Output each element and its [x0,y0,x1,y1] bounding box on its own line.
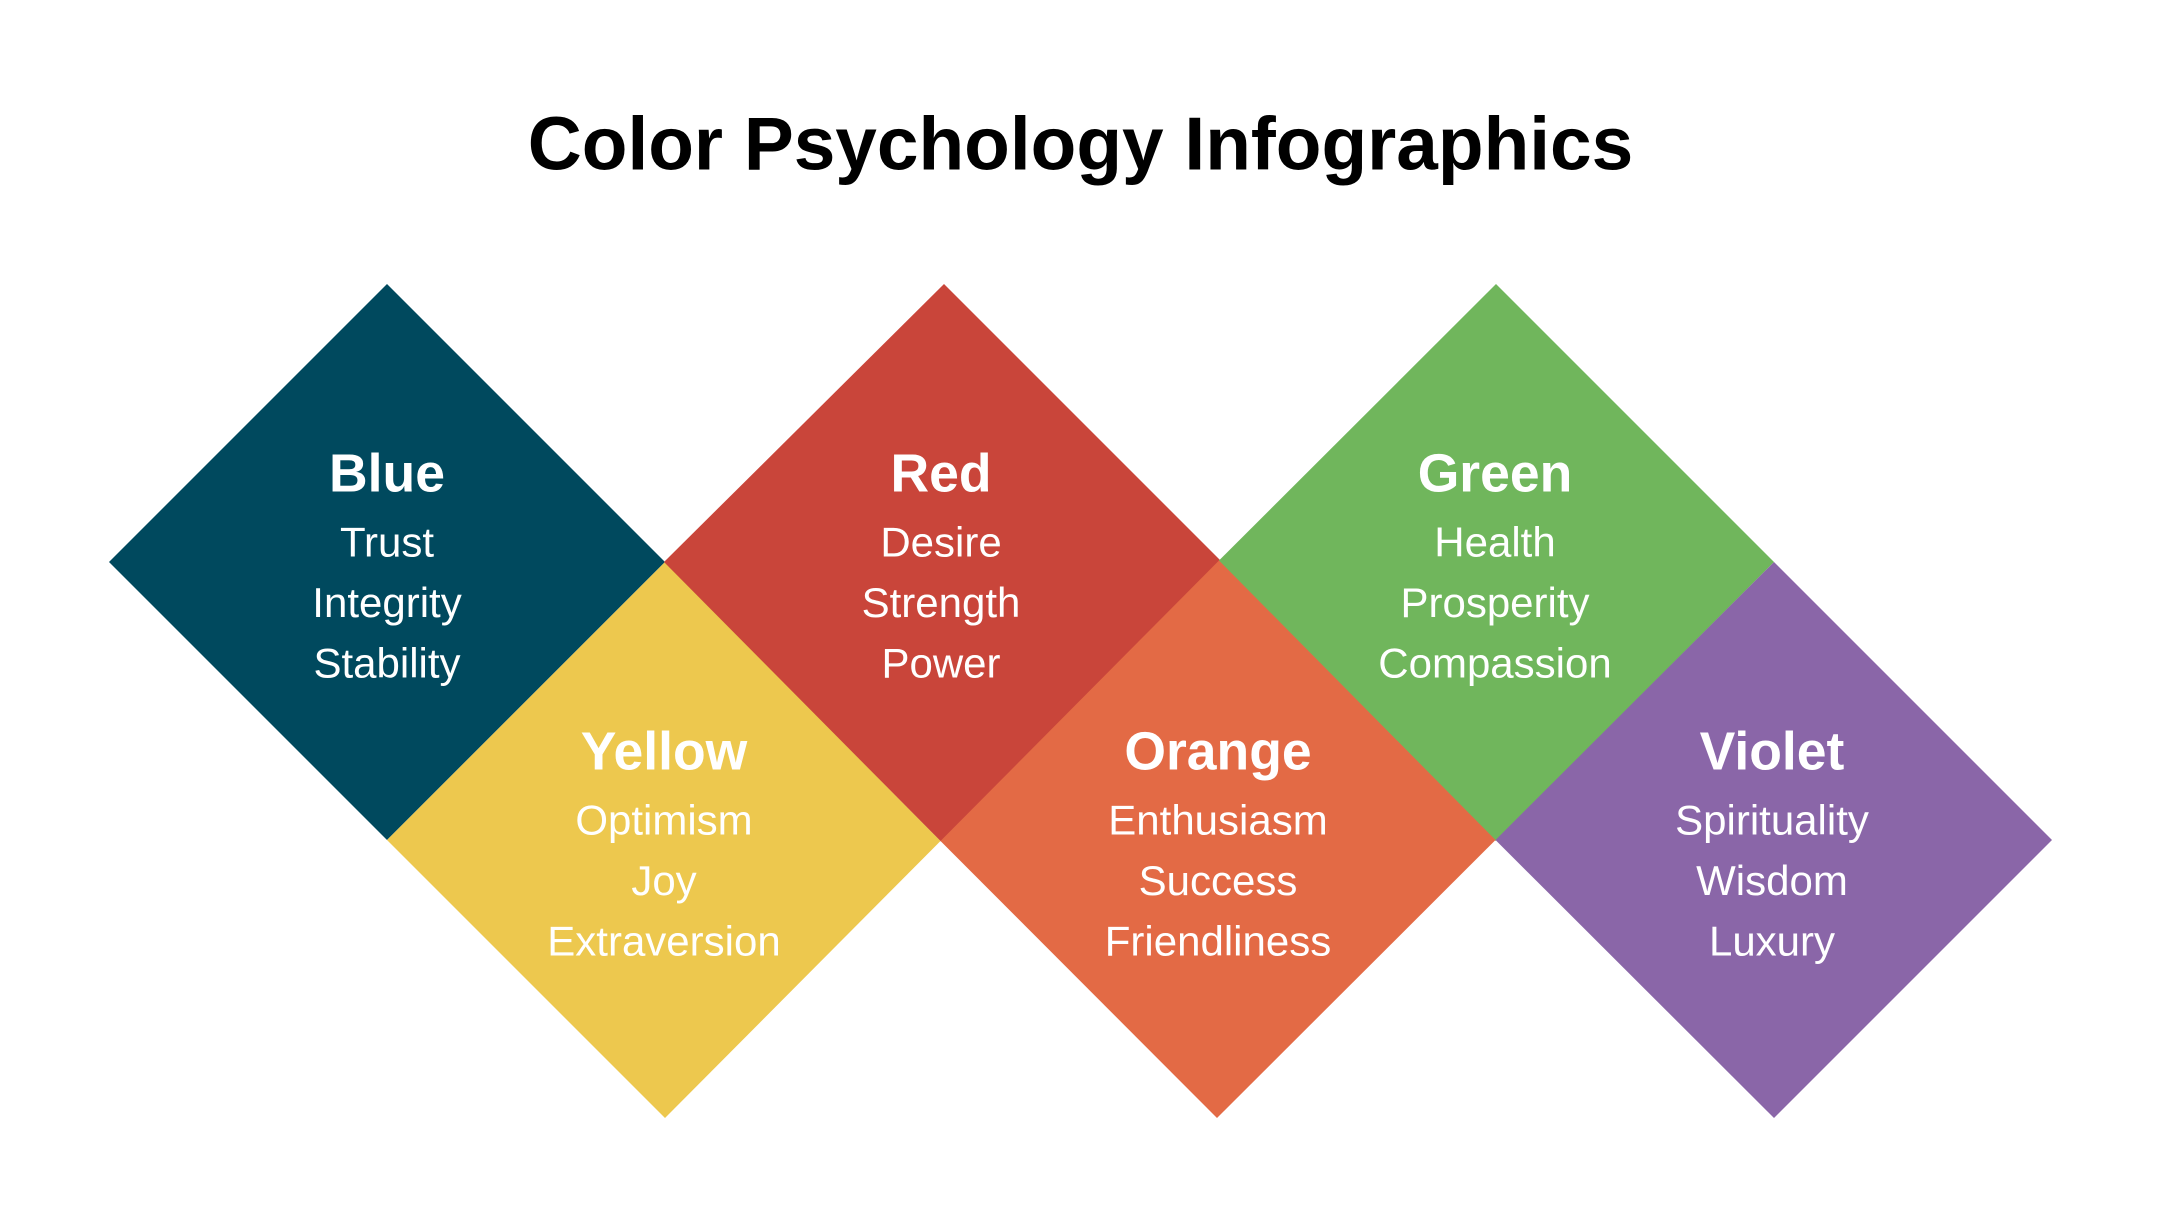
text: orange traits: Enthusiasm [1108,796,1328,844]
text: blue traits: Integrity [312,579,462,626]
text: blue traits [312,518,462,686]
text: yellow traits: Joy [631,857,697,904]
title: Color Psychology Infographics [528,102,1633,186]
text: orange traits [1105,796,1331,964]
text: green traits: Health [1434,518,1556,566]
heading: green: Green [1418,444,1572,504]
panel: violet [1496,562,2052,1118]
panel: blue [109,284,665,840]
panel: green [1218,284,1774,841]
text: yellow traits [547,796,781,964]
heading: violet: Violet [1700,722,1845,782]
text: blue traits: Trust [340,518,434,566]
text: violet traits: Wisdom [1696,857,1848,904]
panel: orange [940,560,1496,1118]
text: red traits: Power [881,640,1001,686]
heading: red: Red [890,444,992,504]
text: red traits [862,518,1020,686]
text: green traits [1378,518,1612,686]
text: violet traits [1675,796,1869,964]
text: red traits: Desire [880,518,1002,566]
text: yellow traits: Optimism [575,796,753,844]
text: green traits: Prosperity [1400,579,1590,626]
text: green traits: Compassion [1378,640,1612,686]
heading: yellow: Yellow [581,722,748,782]
text: orange traits: Friendliness [1105,918,1331,964]
heading: orange: Orange [1124,722,1312,782]
text: orange traits: Success [1139,857,1297,904]
heading: blue: Blue [329,444,445,504]
text: violet traits: Spirituality [1675,796,1869,844]
panel: yellow [387,562,940,1118]
panel: red [664,284,1220,842]
text: violet traits: Luxury [1709,918,1835,964]
text: yellow traits: Extraversion [547,918,781,964]
text: red traits: Strength [862,579,1020,626]
text: blue traits: Stability [313,640,461,686]
